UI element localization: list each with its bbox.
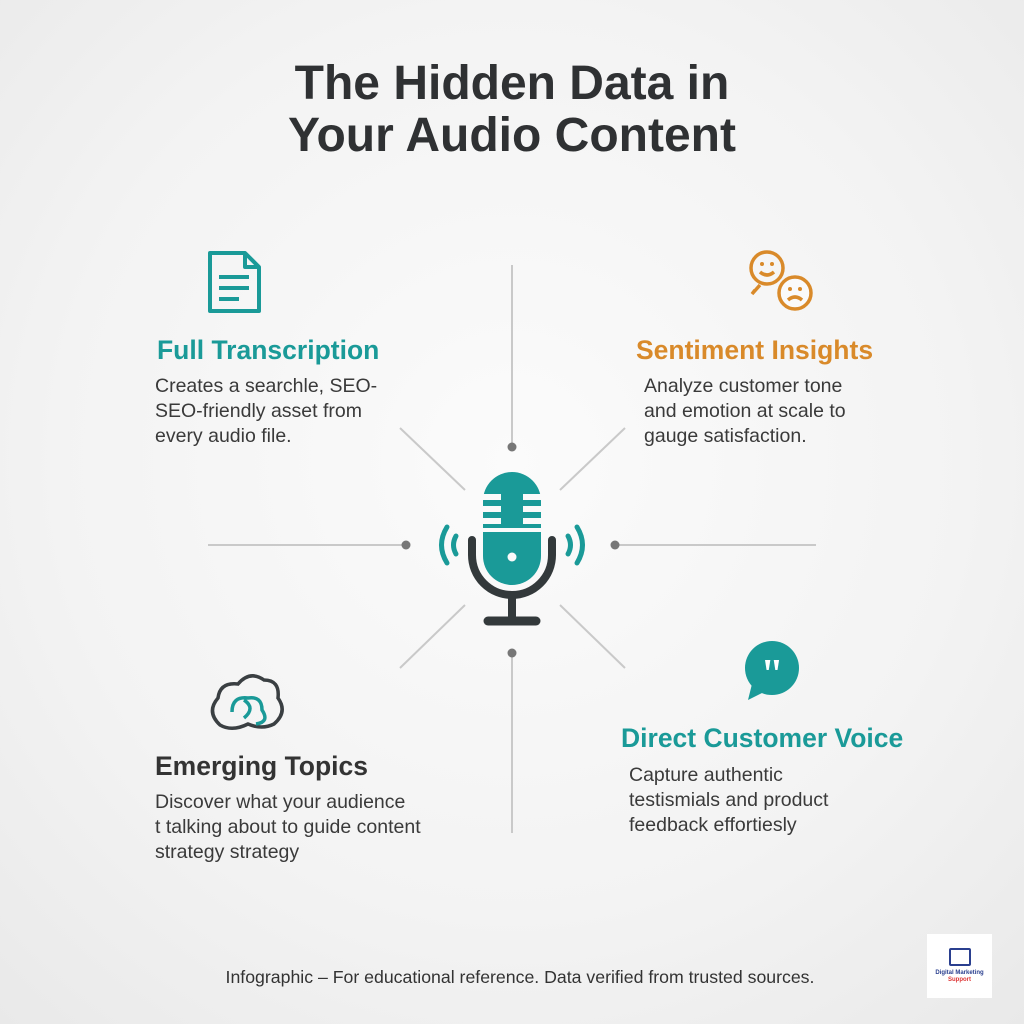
icon: brain cloud: [212, 676, 282, 728]
text: customer voice body: [629, 764, 828, 836]
footer: Infographic – For educational reference. Data verified from trusted sources.: [226, 967, 814, 987]
heading: Full Transcription: Full Transcription: [157, 335, 379, 365]
text: customer voice body: Capture authentic: [629, 764, 783, 786]
text: topics body: Discover what your audience: [155, 791, 405, 813]
text: sentiment body: and emotion at scale to: [644, 400, 846, 422]
logo: Digital Marketing: [935, 970, 984, 976]
heading: Emerging Topics: Emerging Topics: [155, 751, 368, 781]
icon: quote bubble: ": [760, 652, 784, 698]
text: customer voice body: testismials and product: [629, 789, 828, 811]
text: transcription body: [155, 375, 377, 447]
text: transcription body: SEO-friendly asset from: [155, 400, 362, 422]
text: customer voice body: feedback effortiesly: [629, 814, 797, 836]
heading: Direct Customer Voice: Direct Customer Voice: [621, 723, 903, 753]
text: topics body: strategy strategy: [155, 841, 299, 863]
icon: document: [210, 253, 259, 311]
icon: microphone: [442, 472, 582, 621]
title: Your Audio Content: [288, 109, 736, 162]
text: topics body: [155, 791, 421, 863]
text: sentiment body: Analyze customer tone: [644, 375, 842, 397]
logo: Support: [948, 977, 971, 983]
icon: quote bubble: [745, 641, 799, 700]
title: The Hidden Data in: [295, 57, 729, 110]
text: sentiment body: [644, 375, 846, 447]
logo: [927, 934, 992, 998]
text: transcription body: every audio file.: [155, 425, 292, 447]
text: topics body: t talking about to guide content: [155, 816, 421, 838]
text: sentiment body: gauge satisfaction.: [644, 425, 807, 447]
text: transcription body: Creates a searchle, SEO-: [155, 375, 377, 397]
icon: faces: [751, 252, 811, 309]
title: [288, 57, 736, 162]
heading: Sentiment Insights: Sentiment Insights: [636, 335, 873, 365]
